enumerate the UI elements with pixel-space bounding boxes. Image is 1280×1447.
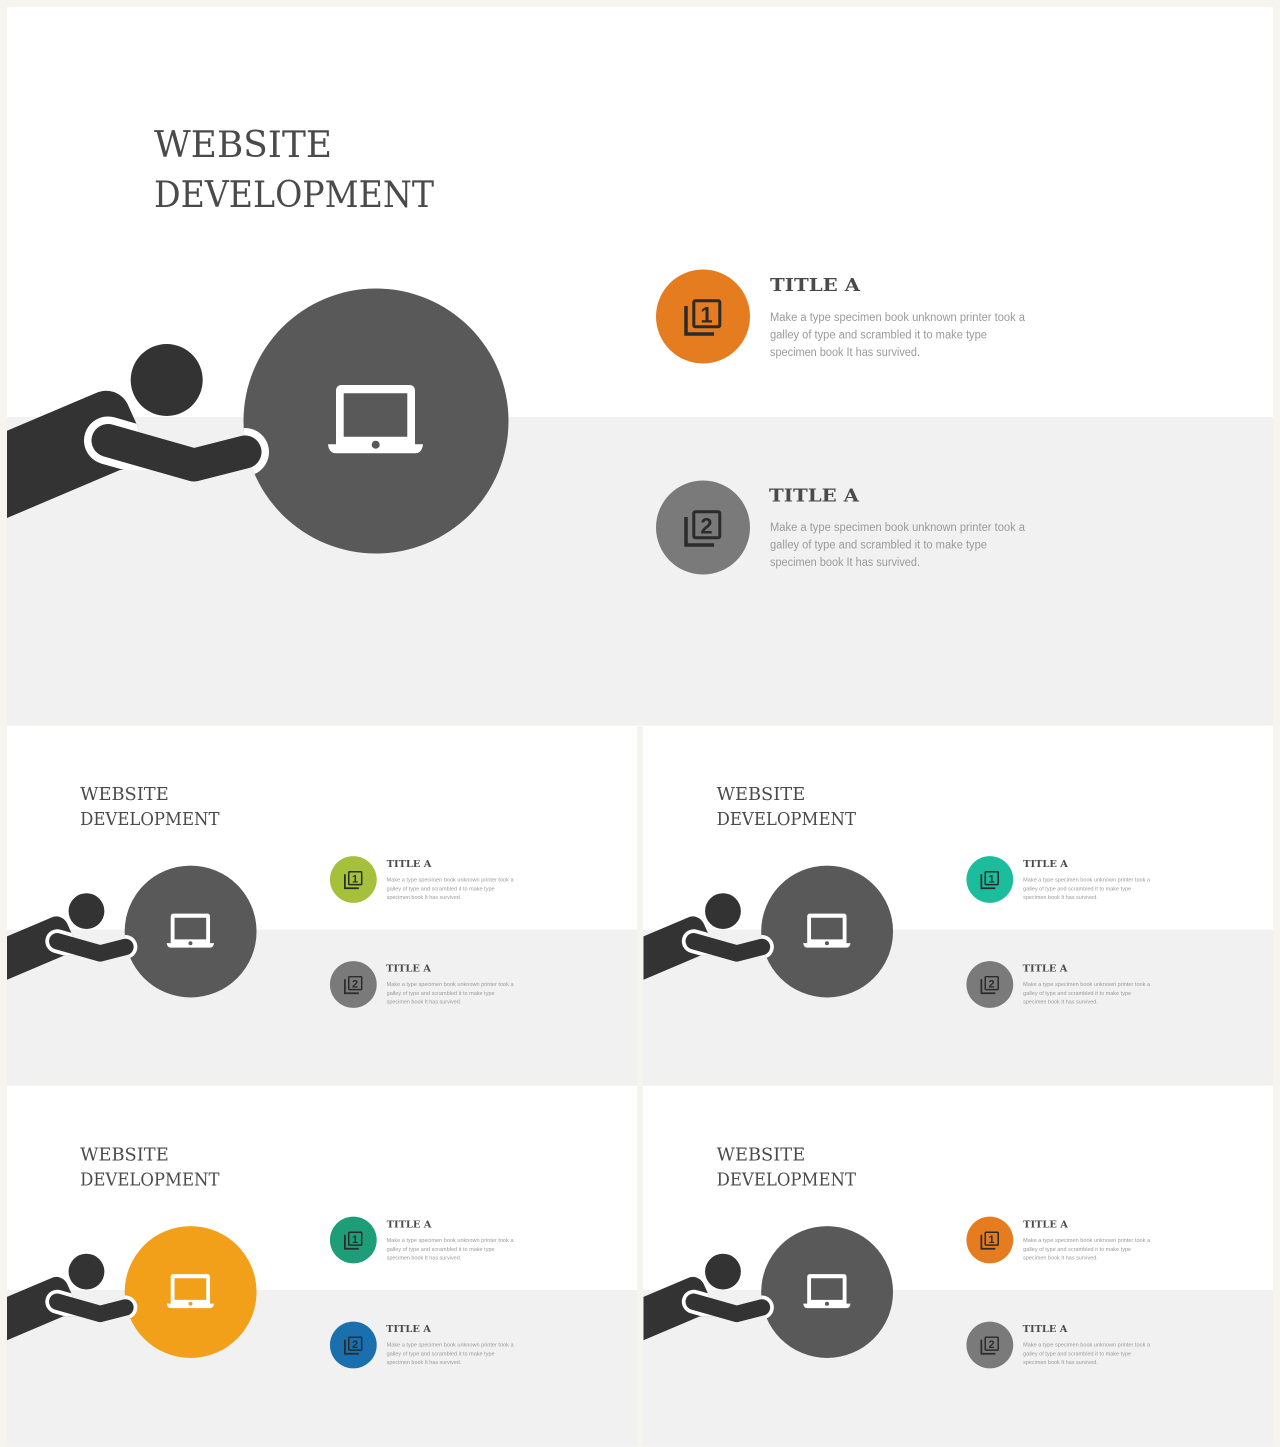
item 1: 1 xyxy=(989,1234,995,1246)
panel: teal variant slide xyxy=(643,726,1273,1008)
item 2: specimen book It has survived. xyxy=(1023,1360,1098,1366)
panel: green variant slide xyxy=(7,726,637,1008)
title: DEVELOPMENT xyxy=(80,809,220,830)
item 1: galley of type and scrambled it to make type xyxy=(770,330,987,342)
item 1: specimen book It has survived. xyxy=(387,895,462,901)
item 1: specimen book It has survived. xyxy=(1023,895,1098,901)
item 1: 1 xyxy=(989,873,995,885)
person figure xyxy=(7,893,125,980)
item 1: 1 xyxy=(352,1234,358,1246)
item 1: TITLE A xyxy=(387,860,433,870)
item 2: TITLE A xyxy=(386,1325,432,1335)
item 2: 2 xyxy=(989,978,995,990)
item 2: Make a type specimen book unknown printer took a xyxy=(1023,982,1151,988)
item 1: Make a type specimen book unknown printer took a xyxy=(387,878,514,884)
person figure xyxy=(644,1254,762,1340)
large circle with laptop xyxy=(761,866,893,997)
item 1: specimen book It has survived. xyxy=(387,1256,462,1262)
panel: orange variant slide xyxy=(643,1086,1273,1368)
person figure xyxy=(7,344,245,518)
item 2: galley of type and scrambled it to make type xyxy=(770,540,987,552)
title: DEVELOPMENT xyxy=(154,175,434,216)
item 2: Make a type specimen book unknown printer took a xyxy=(1023,1343,1151,1349)
item 1: Make a type specimen book unknown printer took a xyxy=(1023,1238,1151,1244)
item 2: TITLE A xyxy=(769,486,860,506)
item 2 xyxy=(656,480,1026,574)
title: DEVELOPMENT xyxy=(717,1170,856,1191)
person figure xyxy=(7,1254,125,1340)
item 1: Make a type specimen book unknown printer took a xyxy=(770,312,1026,324)
item 1: Make a type specimen book unknown printer took a xyxy=(1023,878,1151,884)
item 1: galley of type and scrambled it to make type xyxy=(387,1247,495,1253)
title xyxy=(717,784,856,830)
panel: yellow variant slide xyxy=(7,1086,637,1368)
item 2: specimen book It has survived. xyxy=(770,557,920,569)
item 2 xyxy=(966,961,1151,1008)
title: WEBSITE xyxy=(717,784,805,805)
item 1 xyxy=(656,270,1026,364)
item 2: galley of type and scrambled it to make type xyxy=(387,1351,495,1357)
item 1: TITLE A xyxy=(770,275,861,296)
title: WEBSITE xyxy=(80,1145,169,1166)
item 2: 2 xyxy=(989,1339,995,1351)
item 2: Make a type specimen book unknown printer took a xyxy=(770,522,1026,534)
title xyxy=(80,784,220,830)
item 2: galley of type and scrambled it to make type xyxy=(1023,1351,1131,1357)
title xyxy=(80,1145,220,1191)
item 1: 1 xyxy=(700,302,713,328)
person figure xyxy=(644,893,762,980)
item 1: specimen book It has survived. xyxy=(1023,1256,1098,1262)
title: WEBSITE xyxy=(80,784,169,805)
item 2: galley of type and scrambled it to make type xyxy=(387,991,495,997)
title: WEBSITE xyxy=(154,125,332,166)
item 1: 1 xyxy=(352,873,358,885)
item 2: Make a type specimen book unknown printer took a xyxy=(387,982,514,988)
item 2 xyxy=(966,1322,1151,1368)
item 1: specimen book It has survived. xyxy=(770,347,920,359)
item 1 xyxy=(330,1217,514,1263)
item 2: specimen book It has survived. xyxy=(387,1360,462,1366)
item 2: 2 xyxy=(352,1339,358,1351)
item 2 xyxy=(330,961,514,1008)
item 1: TITLE A xyxy=(1023,860,1069,870)
item 2: 2 xyxy=(700,514,713,538)
item 1: TITLE A xyxy=(1023,1220,1069,1230)
panel: main slide xyxy=(7,7,1273,574)
title xyxy=(717,1145,856,1191)
item 1: TITLE A xyxy=(387,1220,433,1230)
item 2: specimen book It has survived. xyxy=(1023,1000,1098,1006)
large circle with laptop xyxy=(761,1226,893,1358)
item 1: Make a type specimen book unknown printer took a xyxy=(387,1238,514,1244)
item 1 xyxy=(330,856,514,903)
title: DEVELOPMENT xyxy=(80,1170,220,1191)
title: DEVELOPMENT xyxy=(717,809,856,830)
item 1 xyxy=(966,856,1151,903)
title: WEBSITE xyxy=(717,1145,805,1166)
title xyxy=(154,125,434,216)
item 2: Make a type specimen book unknown printer took a xyxy=(387,1343,514,1349)
item 1: galley of type and scrambled it to make type xyxy=(387,886,495,892)
item 2: TITLE A xyxy=(386,965,432,975)
item 2 xyxy=(330,1322,514,1368)
large circle with laptop xyxy=(125,1226,257,1358)
item 1 xyxy=(966,1217,1151,1263)
item 2: 2 xyxy=(352,978,358,990)
item 2: TITLE A xyxy=(1023,965,1069,975)
item 1: galley of type and scrambled it to make type xyxy=(1023,1247,1131,1253)
item 2: galley of type and scrambled it to make type xyxy=(1023,991,1131,997)
large circle with laptop xyxy=(125,866,257,997)
item 2: specimen book It has survived. xyxy=(387,1000,462,1006)
item 2: TITLE A xyxy=(1023,1325,1069,1335)
large circle with laptop xyxy=(244,288,508,554)
item 1: galley of type and scrambled it to make type xyxy=(1023,886,1131,892)
